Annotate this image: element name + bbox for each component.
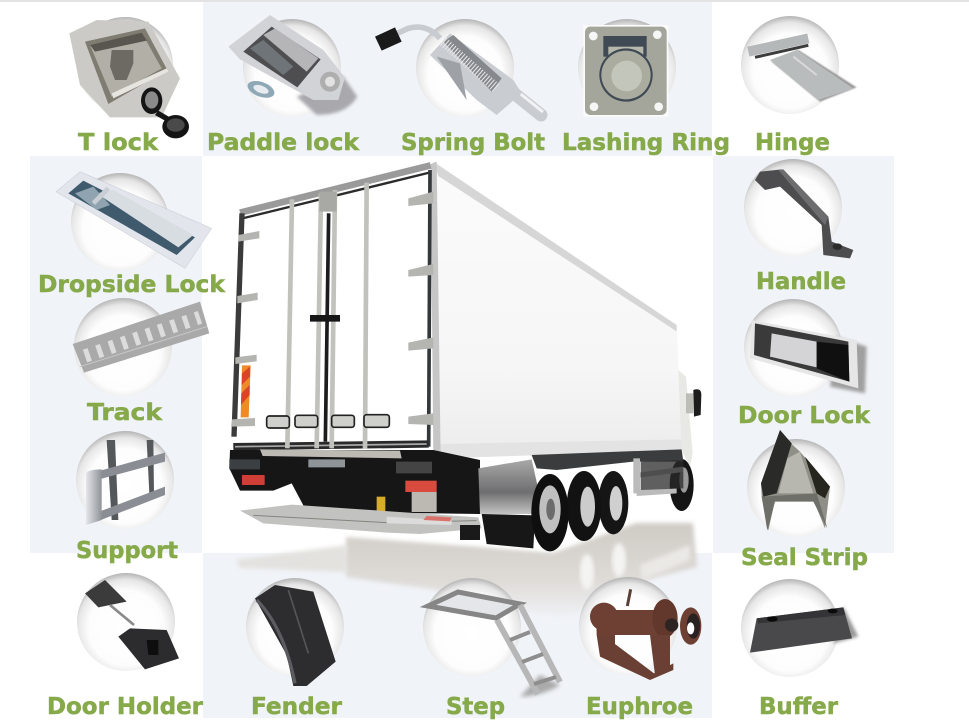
label: T lock: T lock	[78, 130, 159, 156]
label: Euphroe: Euphroe	[586, 694, 693, 720]
wheels	[531, 459, 694, 551]
truck floor reflection	[236, 523, 697, 617]
chassis underside	[229, 450, 480, 514]
tail lights	[242, 475, 265, 485]
hazard stripe	[241, 365, 251, 417]
icon: dropside lock	[56, 172, 212, 271]
mud flap	[482, 514, 535, 548]
label: Track: Track	[87, 400, 163, 426]
label: Support: Support	[76, 538, 178, 564]
label: Handle: Handle	[756, 269, 846, 295]
icon: step	[423, 578, 560, 697]
icon: fender	[246, 578, 344, 686]
door hinges	[232, 192, 433, 427]
label: Door Holder: Door Holder	[47, 694, 204, 720]
label: Lashing Ring: Lashing Ring	[562, 130, 730, 156]
icon: handle	[744, 159, 853, 258]
label: Paddle lock: Paddle lock	[207, 130, 360, 156]
label: Buffer: Buffer	[759, 694, 839, 720]
cab and mirror	[678, 370, 693, 467]
icon: buffer	[741, 579, 858, 677]
tail lift	[240, 505, 482, 534]
door rods	[287, 183, 367, 448]
icon: door holder	[77, 573, 179, 671]
side guard	[478, 459, 541, 514]
icon: paddle lock	[228, 15, 357, 117]
label: Hinge: Hinge	[755, 130, 830, 156]
icon: track	[73, 298, 209, 396]
door frame	[233, 165, 431, 447]
side skirt	[532, 449, 683, 470]
label: Seal Strip: Seal Strip	[741, 545, 868, 571]
label: Spring Bolt: Spring Bolt	[401, 130, 545, 156]
icon: euphroe	[579, 577, 701, 680]
door handles	[267, 415, 389, 428]
corner post	[431, 162, 441, 458]
icon: T lock	[69, 17, 189, 138]
refrigerated truck	[229, 162, 701, 551]
label: Dropside Lock: Dropside Lock	[38, 272, 226, 298]
label: Fender: Fender	[251, 694, 343, 720]
icon: door lock	[744, 299, 867, 397]
icon: spring bolt	[375, 19, 543, 117]
truck box side panel	[433, 163, 682, 458]
icon: lashing ring	[578, 19, 676, 117]
icon: seal strip	[747, 430, 845, 537]
label: Door Lock: Door Lock	[738, 403, 871, 429]
icon: support	[76, 431, 174, 529]
centre seam and latch	[325, 213, 329, 442]
icon: hinge	[741, 16, 857, 114]
label: Step: Step	[446, 694, 505, 720]
rear door	[238, 170, 429, 446]
